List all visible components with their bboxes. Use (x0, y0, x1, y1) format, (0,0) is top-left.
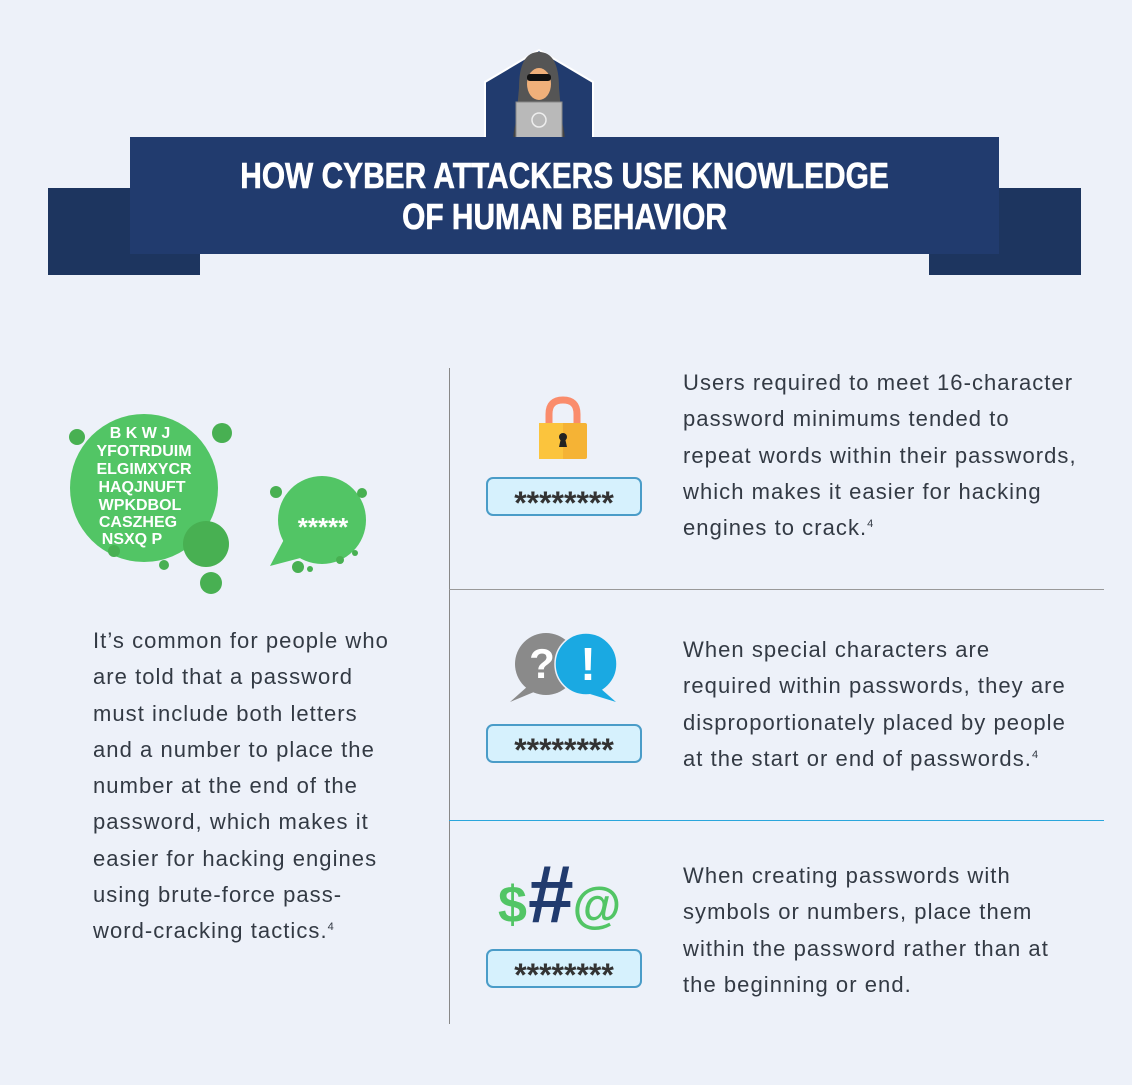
icon: green speech bubbles: WPKDBOL (99, 497, 182, 514)
text: left column: number at the end of the (93, 773, 358, 798)
text: repeat words within their passwords, (683, 443, 1077, 468)
icon: green speech bubbles: B K W J (110, 425, 170, 442)
text: left column: word-cracking tactics.4 (93, 918, 335, 943)
icon: question and exclamation bubbles: ? (529, 640, 555, 687)
icon: question and exclamation bubbles (510, 633, 616, 702)
password field (486, 949, 642, 988)
text: which makes it easier for hacking (683, 479, 1042, 504)
text: within the password rather than at (683, 936, 1049, 961)
icon: question and exclamation bubbles: ! (580, 638, 596, 690)
icon: green speech bubbles: NSXQ P (102, 531, 163, 548)
text: at the start or end of passwords.4 (683, 746, 1039, 771)
password field (486, 477, 642, 516)
text (683, 637, 1066, 771)
text: When special characters are (683, 637, 990, 662)
text: engines to crack.4 (683, 515, 874, 540)
text: left column: It’s common for people who (93, 628, 389, 653)
text (683, 863, 1049, 997)
password field (486, 724, 642, 763)
icon: green speech bubbles: CASZHEG (99, 514, 177, 531)
title: HOW CYBER ATTACKERS USE KNOWLEDGE (240, 155, 889, 196)
right ribbon tail (929, 188, 1081, 275)
title (240, 155, 889, 237)
text: Users required to meet 16-character (683, 370, 1073, 395)
text: left column: using brute-force pass- (93, 882, 342, 907)
title box (130, 137, 999, 254)
icon: green speech bubbles (69, 414, 367, 594)
icon: symbols: $#@ (498, 849, 621, 940)
text: left column: are told that a password (93, 664, 353, 689)
text: the beginning or end. (683, 972, 912, 997)
text: required within passwords, they are (683, 673, 1066, 698)
text (683, 370, 1077, 540)
banner (48, 49, 1081, 275)
icon: hacker badge (484, 49, 594, 137)
icon: green speech bubbles: ELGIMXYCR (96, 461, 192, 478)
icon: green speech bubbles: YFOTRDUIM (96, 443, 192, 460)
text: left column: password, which makes it (93, 809, 369, 834)
row 3 (486, 849, 1049, 997)
row 2 (486, 633, 1066, 771)
text: password minimums tended to (683, 406, 1010, 431)
title: OF HUMAN BEHAVIOR (402, 196, 727, 237)
text: left column (93, 628, 389, 943)
text: When creating passwords with (683, 863, 1011, 888)
text: left column: must include both letters (93, 701, 358, 726)
icon: green speech bubbles: HAQJNUFT (98, 479, 186, 496)
icon: green speech bubbles: ***** (298, 512, 349, 542)
text: disproportionately placed by people (683, 710, 1066, 735)
text: left column: and a number to place the (93, 737, 375, 762)
left ribbon tail (48, 188, 200, 275)
text: symbols or numbers, place them (683, 899, 1032, 924)
icon: padlock (539, 396, 587, 459)
row 1 (486, 370, 1077, 540)
text: left column: easier for hacking engines (93, 846, 377, 871)
divider lines (449, 368, 450, 1024)
